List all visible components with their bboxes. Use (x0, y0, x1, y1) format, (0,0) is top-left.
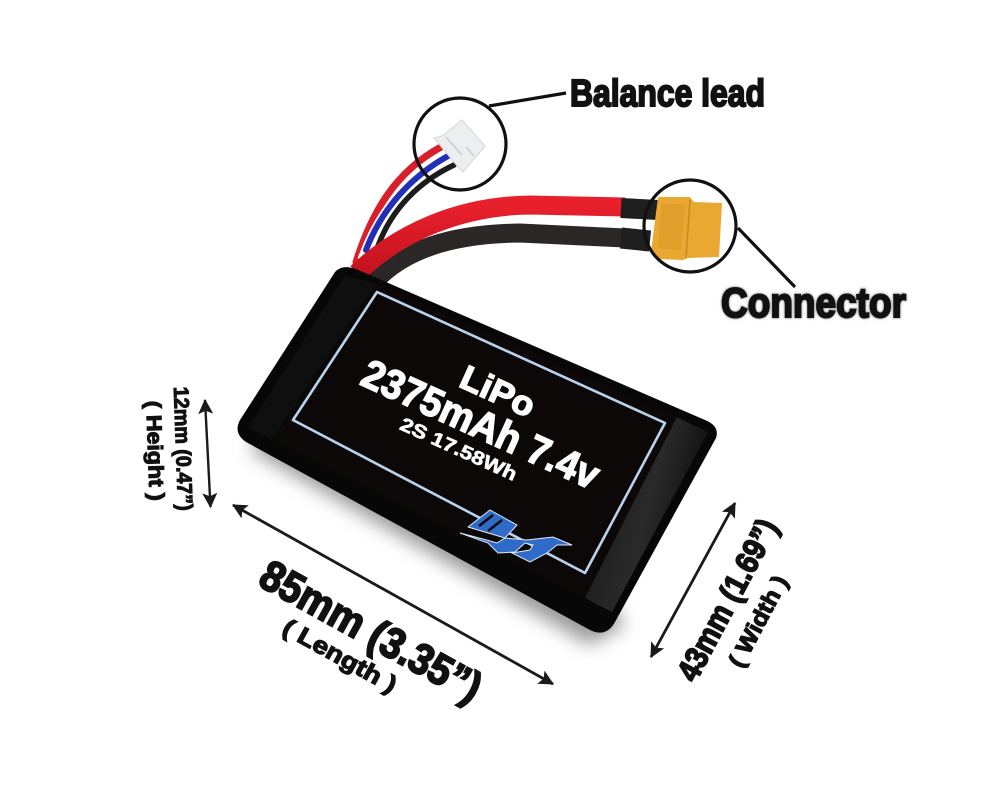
main power wires (357, 205, 658, 284)
arrow: length (233, 505, 553, 684)
label: Balance lead: Balance lead (570, 73, 765, 115)
arrow: width (651, 503, 735, 657)
icon: brand logo (460, 510, 572, 562)
label: height dimension (141, 386, 196, 511)
text: cell count and energy: 2S 17.58Wh (397, 414, 520, 486)
left flap (248, 275, 376, 440)
label: height dimension: 12mm (0.47”) (169, 386, 196, 511)
label: length dimension: 85mm (3.35”) (252, 551, 490, 712)
arrow: height (205, 400, 210, 507)
callout: connector circle and leader (644, 180, 795, 287)
label: Connector: Connector (721, 279, 906, 326)
icon: XT connector (651, 197, 722, 260)
label: width dimension: 43mm (1.69”) (670, 513, 785, 687)
text: LiPo: LiPo (454, 359, 541, 425)
label: width dimension: ( Width ) (723, 571, 793, 671)
callout: balance lead circle and leader (414, 93, 566, 190)
balance lead wires (356, 147, 456, 262)
label: length dimension: ( Length ) (278, 614, 401, 699)
right flap (585, 417, 708, 612)
label: Connector: Connector (721, 279, 906, 326)
battery shadow (250, 420, 625, 645)
icon: balance lead plug (434, 120, 485, 172)
battery body (238, 267, 717, 633)
battery face (273, 283, 677, 598)
label border (293, 292, 665, 573)
text: capacity and voltage: 2375mAh 7.4v (355, 350, 607, 498)
label: height dimension: ( Height ) (141, 400, 168, 501)
